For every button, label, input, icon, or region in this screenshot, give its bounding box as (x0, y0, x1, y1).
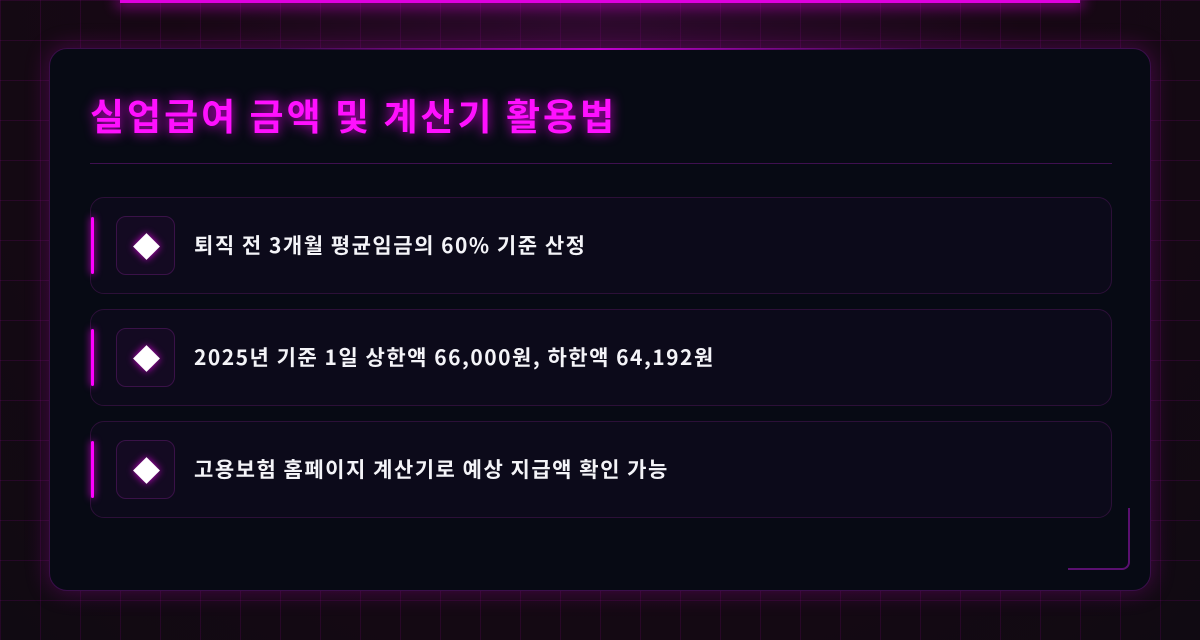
item 2 (90, 309, 1112, 406)
item 3 (90, 421, 1112, 518)
icon: diamond (116, 440, 175, 499)
panel: main card (49, 48, 1151, 591)
text 2: 2025년 기준 1일 상한액 66,000원, 하한액 64,192원 (194, 342, 715, 372)
text 3: 고용보험 홈페이지 계산기로 예상 지급액 확인 가능 (194, 454, 669, 484)
text 1: 퇴직 전 3개월 평균임금의 60% 기준 산정 (194, 230, 586, 260)
title: 실업급여 금액 및 계산기 활용법 (90, 87, 617, 141)
icon: diamond (116, 216, 175, 275)
item 1 (90, 197, 1112, 294)
icon: diamond (116, 328, 175, 387)
